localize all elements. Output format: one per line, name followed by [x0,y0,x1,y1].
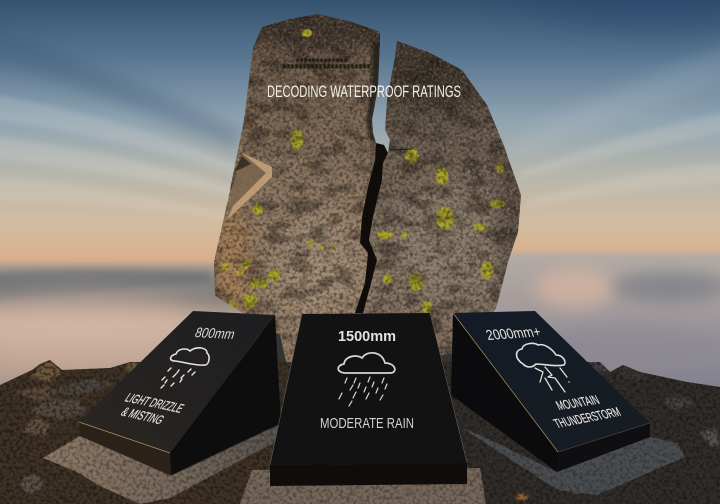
yellow lichen patches [221,29,505,313]
icon: moderate rain cloud [338,353,395,406]
slab: 1500mm moderate rain [270,313,467,486]
background: sky [0,0,720,280]
label: & MISTING [118,405,167,427]
label: MODERATE RAIN [320,415,414,432]
left and right rock halves [214,14,521,362]
split standing stone [214,14,521,362]
value: 1500mm [338,329,396,345]
slab body [270,313,467,486]
blurred engraving [283,60,371,67]
horizontal crack on right rock [390,149,412,150]
value: 2000mm+ [484,325,543,344]
background: cloud sea [0,253,720,404]
label: MOUNTAIN [553,392,602,413]
rocky ground [0,359,720,504]
fissure shadow on left rock edge [366,40,380,143]
value: 800mm [193,325,237,343]
icon: thunderstorm cloud [516,343,570,392]
left boulders [15,360,140,493]
label [551,392,623,431]
label: LIGHT DRIZZLE [122,391,187,415]
label: THUNDERSTORM [551,405,623,431]
carved chip on left rock [228,154,266,218]
title: DECODING WATERPROOF RATINGS [267,83,461,101]
central crack [355,143,388,313]
slab body [79,311,281,475]
right boulders [516,359,720,501]
slab: 2000mm+ mountain thunderstorm [451,311,650,472]
slab body [451,311,650,472]
icon: light rain cloud [161,348,209,388]
label [118,391,187,427]
slab: 800mm light drizzle [79,311,281,475]
stone bases under slabs [40,420,690,504]
